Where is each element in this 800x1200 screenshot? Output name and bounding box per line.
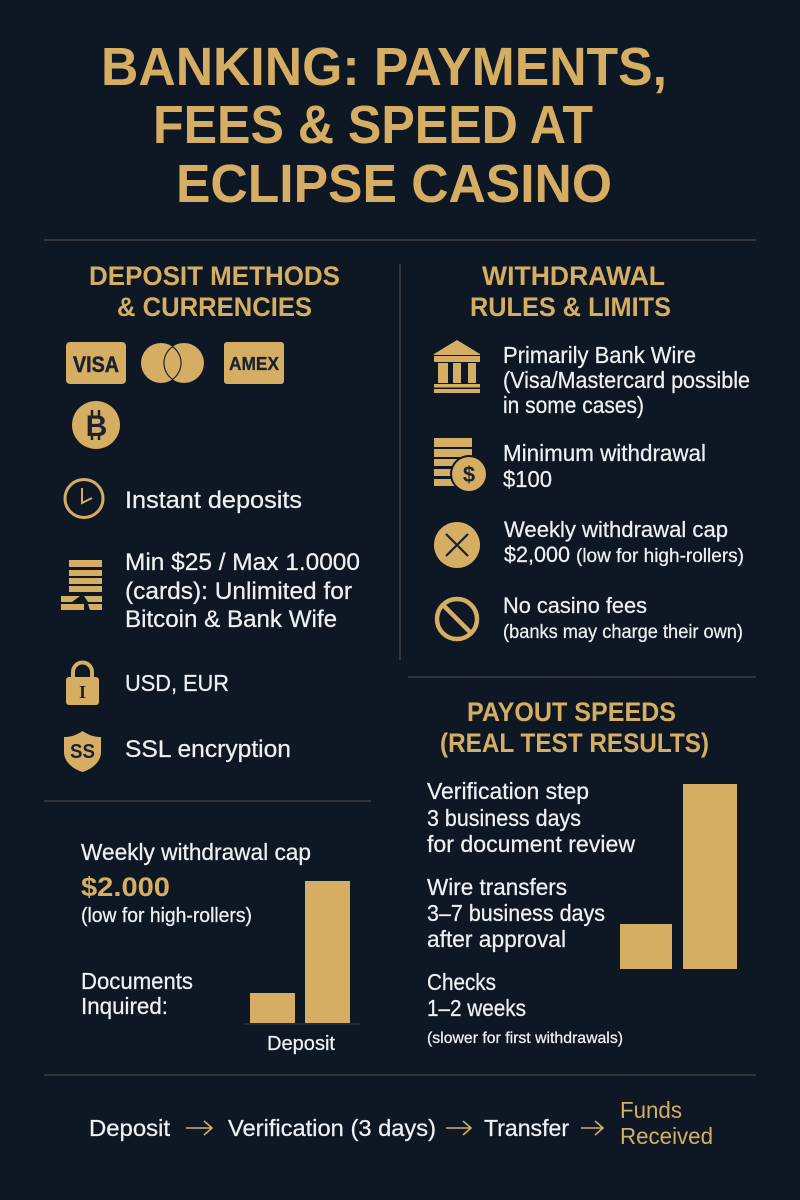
text: weekly cap callout: $2.000 xyxy=(81,872,170,902)
text: verification step: Verification step xyxy=(427,778,589,804)
text: checks xyxy=(427,969,623,1047)
text: instant deposits: Instant deposits xyxy=(125,487,302,514)
text: minimum withdrawal: $100 xyxy=(503,466,552,492)
text: no casino fees: (banks may charge their own) xyxy=(503,622,743,643)
heading: withdrawal rules and limits xyxy=(470,261,671,322)
text: primarily bank wire: (Visa/Mastercard possible xyxy=(503,367,750,393)
icon: ssl shield: SS xyxy=(70,741,95,763)
text: deposit limits: (cards): Unlimited for xyxy=(125,578,352,605)
flow: deposit to funds received: Received xyxy=(620,1123,713,1149)
text: wire transfers: 3–7 business days xyxy=(427,900,605,926)
text: wire transfers xyxy=(427,874,605,952)
icon: visa card xyxy=(66,342,126,384)
text: weekly withdrawal cap: Weekly withdrawal cap xyxy=(504,517,728,542)
text: weekly cap callout xyxy=(81,839,311,927)
arrow xyxy=(186,1121,212,1135)
icon: mastercard circles xyxy=(141,343,204,383)
text: weekly withdrawal cap: $2,000 xyxy=(504,542,570,567)
icon: ssl shield xyxy=(64,731,101,772)
text: primarily bank wire: in some cases) xyxy=(503,392,644,418)
heading: withdrawal rules and limits: WITHDRAWAL xyxy=(482,261,665,291)
title: BANKING: PAYMENTS, xyxy=(101,37,667,97)
arrow xyxy=(581,1121,603,1135)
icon: coin stack xyxy=(61,560,102,610)
title: ECLIPSE CASINO xyxy=(176,154,612,214)
flow: deposit to funds received: Transfer xyxy=(484,1115,569,1141)
icon: padlock xyxy=(66,662,99,705)
icon: clock xyxy=(65,480,103,518)
heading: payout speeds: PAYOUT SPEEDS xyxy=(467,697,676,727)
text: primarily bank wire: Primarily Bank Wire xyxy=(503,342,696,368)
text: currencies: USD, EUR xyxy=(125,670,229,696)
text: checks: (slower for first withdrawals) xyxy=(427,1030,623,1047)
text: documents inquired: Inquired: xyxy=(81,993,168,1019)
text: no casino fees: No casino fees xyxy=(503,593,647,618)
flow: deposit to funds received: Funds xyxy=(620,1097,682,1123)
text: verification step: for document review xyxy=(427,831,635,857)
icon: visa card: VISA xyxy=(73,352,119,377)
icon: bitcoin: B xyxy=(86,410,107,443)
text: wire transfers: after approval xyxy=(427,926,566,952)
text: verification step: 3 business days xyxy=(427,805,581,831)
text: deposit limits: Min $25 / Max 1.0000 xyxy=(125,549,360,576)
arrow xyxy=(446,1121,471,1135)
icon: padlock: I xyxy=(79,682,86,702)
text: weekly cap callout: Weekly withdrawal cap xyxy=(81,839,311,865)
text: ssl encryption: SSL encryption xyxy=(125,736,291,763)
text: wire transfers: Wire transfers xyxy=(427,874,567,900)
text: documents inquired xyxy=(81,968,193,1019)
icon: bank xyxy=(434,340,480,393)
icon: coins with dollar xyxy=(434,438,488,493)
text: documents inquired: Documents xyxy=(81,968,193,994)
heading: withdrawal rules and limits: RULES & LIMITS xyxy=(470,292,671,322)
text: checks: Checks xyxy=(427,969,496,995)
icon: x circle xyxy=(434,522,480,568)
text: weekly cap callout: (low for high-rollers) xyxy=(81,905,252,927)
text: deposit limits: Bitcoin & Bank Wife xyxy=(125,606,337,633)
icon: amex card xyxy=(224,342,284,384)
heading: deposit methods and currencies: DEPOSIT METHODS xyxy=(89,261,340,291)
text: weekly withdrawal cap xyxy=(504,517,744,567)
text: minimum withdrawal: Minimum withdrawal xyxy=(503,440,706,466)
bar chart: deposit: Deposit xyxy=(267,1033,335,1055)
flow: deposit to funds received xyxy=(89,1097,713,1149)
title: FEES & SPEED AT xyxy=(153,95,593,155)
text: verification step xyxy=(427,778,635,857)
heading: payout speeds: (REAL TEST RESULTS) xyxy=(440,728,709,758)
icon: coins with dollar: $ xyxy=(463,462,475,487)
title xyxy=(101,37,667,214)
heading: deposit methods and currencies xyxy=(89,261,340,322)
flow: deposit to funds received: Deposit xyxy=(89,1115,171,1141)
flow: deposit to funds received: Verification (3 days) xyxy=(228,1115,436,1141)
icon: bitcoin xyxy=(72,401,120,449)
text: primarily bank wire xyxy=(503,342,750,418)
text: minimum withdrawal xyxy=(503,440,706,492)
text: no casino fees xyxy=(503,593,743,643)
icon: no symbol xyxy=(437,599,477,639)
bar chart: deposit xyxy=(244,881,360,1055)
bar chart: payout speeds xyxy=(620,784,737,969)
heading: payout speeds xyxy=(440,697,709,758)
icon: amex card: AMEX xyxy=(229,354,279,374)
text: weekly withdrawal cap: (low for high-rollers) xyxy=(576,546,744,567)
heading: deposit methods and currencies: & CURRENCIES xyxy=(117,292,312,322)
text: checks: 1–2 weeks xyxy=(427,995,526,1021)
text: deposit limits xyxy=(125,549,360,633)
